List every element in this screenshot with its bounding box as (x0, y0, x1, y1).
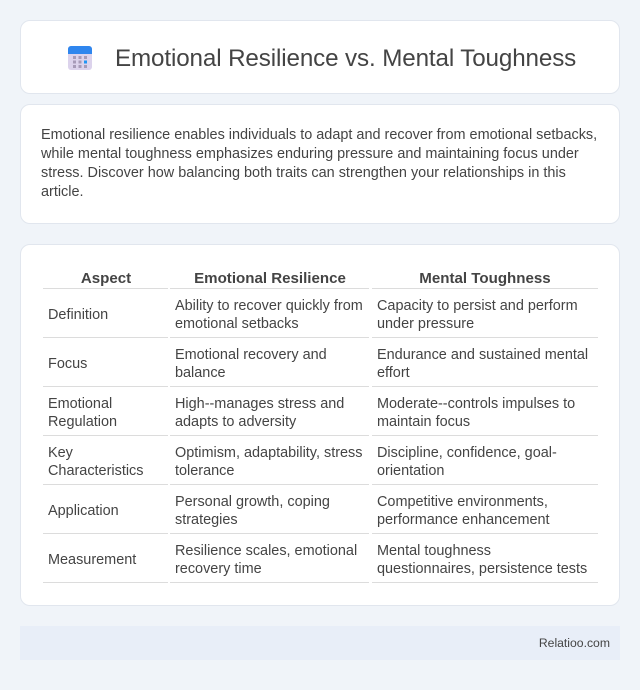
row: measurement: Measurement (48, 552, 136, 568)
row: measurement (48, 543, 587, 577)
row: emotional regulation: adapts to adversity (175, 414, 296, 430)
title: Emotional Resilience vs. Mental Toughness (115, 45, 576, 72)
row: focus: Focus (48, 356, 87, 372)
table header (81, 270, 551, 287)
row: application: Competitive environments, (377, 494, 548, 510)
row: key characteristics: Characteristics (48, 463, 143, 479)
row: emotional regulation: Emotional (48, 396, 112, 412)
row: definition (48, 298, 578, 332)
row: emotional regulation: High--manages stress and (175, 396, 344, 412)
row: emotional regulation: maintain focus (377, 414, 470, 430)
row: key characteristics (48, 445, 557, 479)
intro text (41, 127, 597, 200)
row: application: Personal growth, coping (175, 494, 330, 510)
row: emotional regulation: Regulation (48, 414, 117, 430)
comparison table (43, 270, 598, 583)
table header: Aspect (81, 270, 131, 287)
footer text: Relatioo.com (539, 636, 610, 650)
row: definition: under pressure (377, 316, 474, 332)
intro text: stress. Discover how balancing both traits can strengthen your relationships in this (41, 165, 566, 181)
intro text: article. (41, 184, 84, 200)
footer bar (20, 626, 620, 660)
row: focus: Emotional recovery and (175, 347, 327, 363)
row: measurement: Resilience scales, emotional (175, 543, 357, 559)
row: focus (48, 347, 588, 381)
row: emotional regulation: Moderate--controls impulses to (377, 396, 575, 412)
row: definition: Definition (48, 307, 108, 323)
row: focus: balance (175, 365, 226, 381)
row: key characteristics: orientation (377, 463, 444, 479)
row: definition: emotional setbacks (175, 316, 299, 332)
icon: calendar (68, 46, 92, 70)
table header: Emotional Resilience (194, 270, 346, 287)
row: key characteristics: tolerance (175, 463, 234, 479)
table header: Mental Toughness (419, 270, 551, 287)
row: measurement: questionnaires, persistence tests (377, 561, 587, 577)
intro text: Emotional resilience enables individuals to adapt and recover from emotional setbacks, (41, 127, 597, 143)
intro text: while mental toughness emphasizes enduring pressure and maintaining focus under (41, 146, 579, 162)
row: focus: effort (377, 365, 410, 381)
row: definition: Capacity to persist and perform (377, 298, 578, 314)
header card (20, 20, 620, 94)
row: emotional regulation (48, 396, 575, 430)
intro card (20, 104, 620, 224)
row: key characteristics: Optimism, adaptability, stress (175, 445, 362, 461)
row: key characteristics: Discipline, confidence, goal- (377, 445, 557, 461)
row: measurement: Mental toughness (377, 543, 491, 559)
row: focus: Endurance and sustained mental (377, 347, 588, 363)
row: application: Application (48, 503, 119, 519)
row: application: strategies (175, 512, 238, 528)
row: key characteristics: Key (48, 445, 73, 461)
row: measurement: recovery time (175, 561, 262, 577)
row: application: performance enhancement (377, 512, 550, 528)
row: definition: Ability to recover quickly from (175, 298, 363, 314)
row: application (48, 494, 550, 528)
table card (20, 244, 620, 606)
